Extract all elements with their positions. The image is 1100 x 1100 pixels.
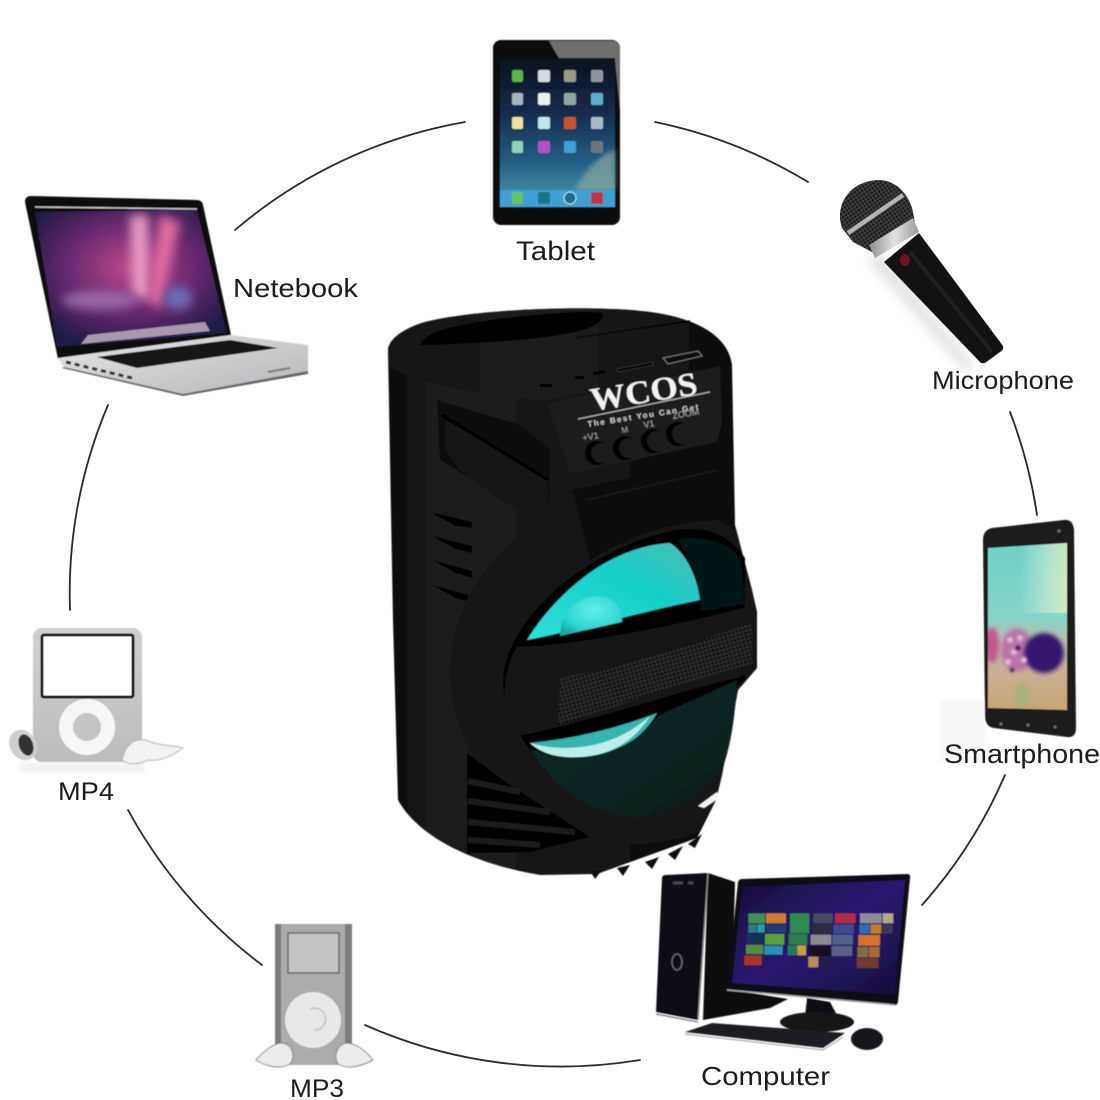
tower trim bbox=[656, 873, 708, 1022]
tower side bbox=[703, 873, 788, 1020]
label: MP4: MP4 bbox=[58, 778, 114, 806]
brand logo and controls: M bbox=[621, 425, 629, 435]
usb and card ports bbox=[540, 351, 702, 387]
laptop front edge bbox=[62, 367, 308, 396]
driver dark reflector bbox=[677, 538, 745, 611]
tablet dock bbox=[500, 190, 615, 207]
device: MP3 player bbox=[256, 924, 373, 1067]
driver dome bbox=[560, 596, 622, 636]
brand logo and controls: V1 bbox=[643, 418, 655, 430]
front bezel bbox=[466, 508, 758, 845]
microphone shadow bbox=[868, 250, 975, 372]
keyboard bbox=[685, 1023, 845, 1048]
laptop keyboard bbox=[97, 340, 278, 368]
laptop screen bbox=[35, 210, 227, 347]
laptop dock bbox=[81, 322, 210, 344]
microphone collar bbox=[869, 218, 919, 258]
mp4 body bbox=[33, 628, 142, 762]
label: Microphone: Microphone bbox=[932, 367, 1074, 395]
start screen tiles bbox=[744, 913, 893, 968]
tablet body bbox=[493, 40, 620, 225]
left earbud bbox=[4, 725, 42, 765]
brand logo and controls bbox=[578, 366, 710, 465]
laptop base bbox=[58, 335, 308, 396]
carry handle opening bbox=[420, 312, 603, 345]
strap mesh bbox=[558, 622, 753, 726]
right earbud bbox=[122, 740, 183, 764]
cap seam bbox=[575, 321, 690, 338]
label: Tablet: Tablet bbox=[516, 236, 596, 266]
speaker cavity bbox=[503, 529, 745, 760]
phone buttons bbox=[999, 529, 1061, 729]
head band bbox=[848, 195, 903, 233]
aurora rays bbox=[62, 215, 192, 310]
mp3 right earbud bbox=[336, 1043, 373, 1067]
side vents upper bbox=[437, 400, 550, 520]
monitor screen bbox=[732, 880, 905, 995]
handle highlight bbox=[910, 252, 992, 352]
laptop ports bbox=[66, 362, 132, 378]
smudge behind phone bbox=[940, 700, 985, 762]
mp3 left earbud bbox=[256, 1043, 293, 1067]
tablet top sheen bbox=[549, 41, 620, 110]
side fins bbox=[430, 512, 472, 603]
device: microphone bbox=[840, 180, 1003, 372]
label: Smartphone: Smartphone bbox=[944, 739, 1100, 769]
device: computer bbox=[656, 873, 910, 1050]
device: MP4 player bbox=[4, 628, 183, 772]
mp4 screen bbox=[42, 635, 133, 697]
laptop lid bbox=[25, 196, 231, 359]
brand logo and controls: WCOS bbox=[588, 366, 700, 419]
mp3 wheel centre bbox=[310, 1008, 326, 1030]
dark teal lower shell bbox=[532, 680, 737, 817]
tower drive slots bbox=[673, 882, 693, 884]
laptop top sheen bbox=[35, 207, 197, 209]
label: Computer: Computer bbox=[701, 1061, 830, 1091]
speaker product bbox=[387, 307, 758, 880]
monitor bottom trim bbox=[727, 990, 895, 1005]
monitor base bbox=[780, 1012, 854, 1032]
base highlight bbox=[698, 792, 719, 808]
microphone handle bbox=[884, 233, 1003, 363]
label: Netebook: Netebook bbox=[233, 273, 359, 303]
circular connector arcs bbox=[70, 122, 1037, 1067]
tower front bbox=[656, 873, 708, 1020]
teal driver upper bbox=[527, 543, 700, 640]
mp3 body bbox=[275, 924, 352, 1065]
fabric strap bbox=[505, 607, 757, 737]
bottom vents bbox=[467, 753, 590, 853]
mp4 reflection bbox=[20, 762, 145, 772]
mp4 wheel bbox=[59, 699, 115, 755]
mp4 wheel centre bbox=[73, 713, 101, 741]
tablet wallpaper plant bbox=[575, 150, 615, 190]
brand logo and controls: The Best You Can Get bbox=[587, 403, 699, 429]
mp3 wheel bbox=[285, 992, 341, 1048]
monitor stand bbox=[805, 998, 838, 1017]
keyboard edge bbox=[685, 1034, 843, 1050]
device: smartphone bbox=[982, 519, 1077, 738]
mp3 screen bbox=[288, 933, 339, 973]
mp3 side stripes bbox=[275, 924, 352, 1054]
teal driver lower bbox=[530, 713, 657, 757]
speaker feet teeth bbox=[590, 834, 702, 879]
phone screen bbox=[988, 543, 1067, 710]
brand logo and controls: ZOOM bbox=[672, 406, 700, 421]
tablet screen bbox=[500, 58, 615, 207]
microphone red light bbox=[900, 254, 910, 266]
mouse bbox=[851, 1028, 883, 1050]
speaker body bbox=[388, 308, 757, 875]
tower power ring bbox=[672, 954, 682, 970]
laptop latch bbox=[268, 368, 290, 372]
microphone head bbox=[840, 180, 917, 252]
phone body bbox=[983, 520, 1076, 737]
tablet app icons bbox=[512, 70, 603, 204]
device: tablet bbox=[493, 40, 620, 225]
brand logo and controls: +V1 bbox=[582, 430, 599, 443]
top cap bbox=[388, 308, 732, 400]
phone wallpaper bbox=[985, 543, 1067, 707]
device: notebook laptop bbox=[25, 196, 308, 396]
monitor frame bbox=[727, 874, 910, 1005]
upper bezel shadow bbox=[572, 455, 730, 560]
control panel bbox=[547, 366, 722, 474]
